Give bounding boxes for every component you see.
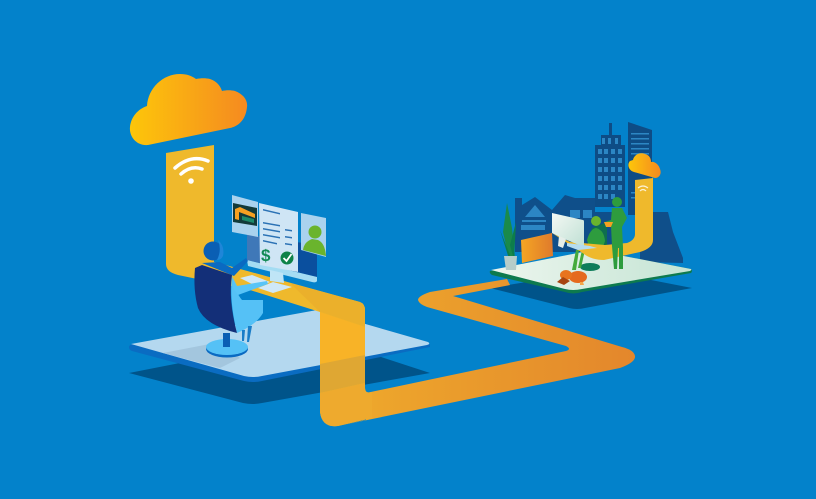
woman with cup: [604, 197, 627, 269]
keyboard: [240, 275, 292, 293]
left platform shadow: [129, 336, 430, 404]
road: orange path between platforms: [338, 279, 635, 426]
screen panel: video call: [301, 213, 326, 257]
cloud right: [628, 153, 661, 178]
tower left: [595, 123, 625, 207]
tower right: [628, 122, 652, 215]
wifi pillar and desk band: [166, 145, 372, 426]
icon: wifi: [175, 159, 208, 184]
chair base: [206, 340, 248, 358]
right desk with small band: [552, 178, 653, 260]
body and arm: [202, 258, 248, 276]
head: [204, 242, 222, 260]
forearm: [233, 278, 268, 295]
seat: [231, 275, 263, 333]
monitor: [247, 235, 317, 283]
dollar sign: $: [261, 246, 271, 265]
vertical over shadow: [320, 355, 365, 393]
chair back: [194, 265, 237, 333]
seated person: [572, 216, 607, 271]
vertical lower: [320, 383, 372, 426]
dog: [557, 270, 587, 285]
icon: small wifi: [638, 186, 648, 191]
houses: [515, 195, 615, 252]
icon: check: [280, 252, 294, 264]
legs: [242, 326, 252, 342]
plant: [500, 203, 517, 270]
person at desk: [194, 240, 268, 358]
desk overlap: [290, 283, 365, 327]
city skyline: [515, 122, 683, 263]
vertical front: [320, 312, 365, 364]
right platform shadow: [490, 270, 692, 309]
chair stem: [223, 333, 230, 347]
right monitor: [552, 213, 597, 250]
left platform: [129, 310, 430, 382]
screen panel: document: [259, 203, 298, 272]
cloud left: [130, 74, 247, 145]
pillar: [166, 145, 372, 426]
orange cabinet: [521, 233, 553, 263]
screen panel: chart: [232, 195, 258, 237]
right platform: [490, 250, 692, 294]
